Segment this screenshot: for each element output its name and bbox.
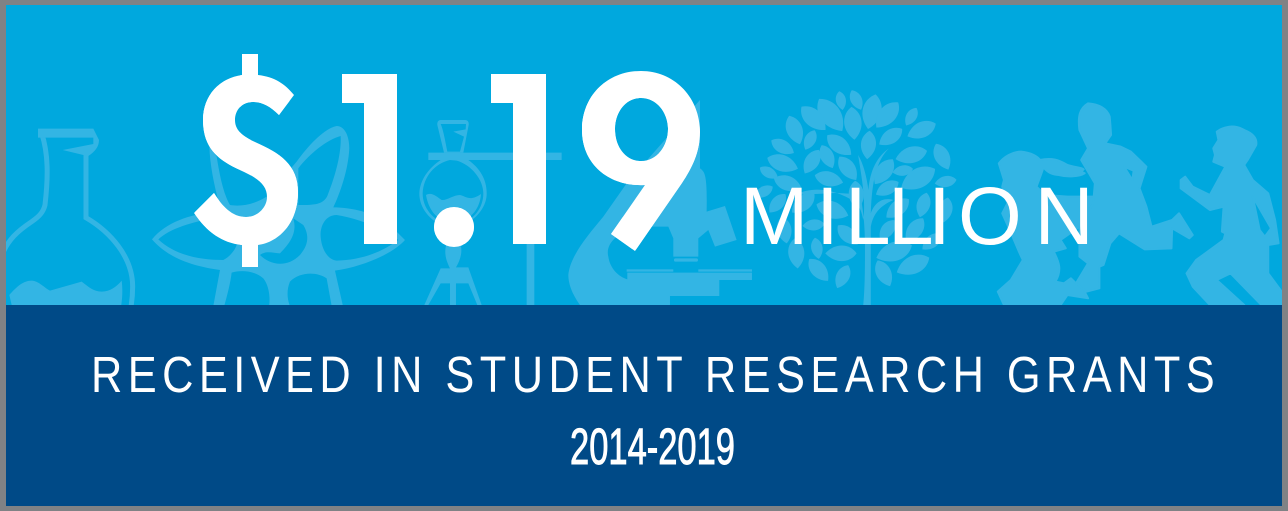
digit nine: 9 <box>573 22 709 300</box>
boy <box>1076 103 1193 292</box>
date range: 2014-2019 <box>570 418 735 475</box>
background illustrations <box>3 88 1283 315</box>
icon: tree <box>752 88 958 305</box>
girl <box>998 152 1100 305</box>
icon: flask <box>3 129 133 315</box>
icon: atom <box>152 126 405 315</box>
older boy <box>1181 127 1283 305</box>
icon: microscope <box>568 100 752 305</box>
dollar sign: $ <box>188 22 302 296</box>
panel: blue banner <box>6 5 1282 305</box>
digit one: 1 <box>330 26 464 296</box>
big figure <box>194 54 700 267</box>
decimal point: . <box>414 26 494 296</box>
unit: million: MILLION <box>740 171 1094 262</box>
subtitle: RECEIVED IN STUDENT RESEARCH GRANTS <box>91 347 1215 404</box>
digit one: 1 <box>479 26 613 296</box>
panel: navy footer <box>6 305 1282 506</box>
icon: running children <box>998 103 1283 305</box>
icon: retort flask on stand <box>419 120 562 305</box>
